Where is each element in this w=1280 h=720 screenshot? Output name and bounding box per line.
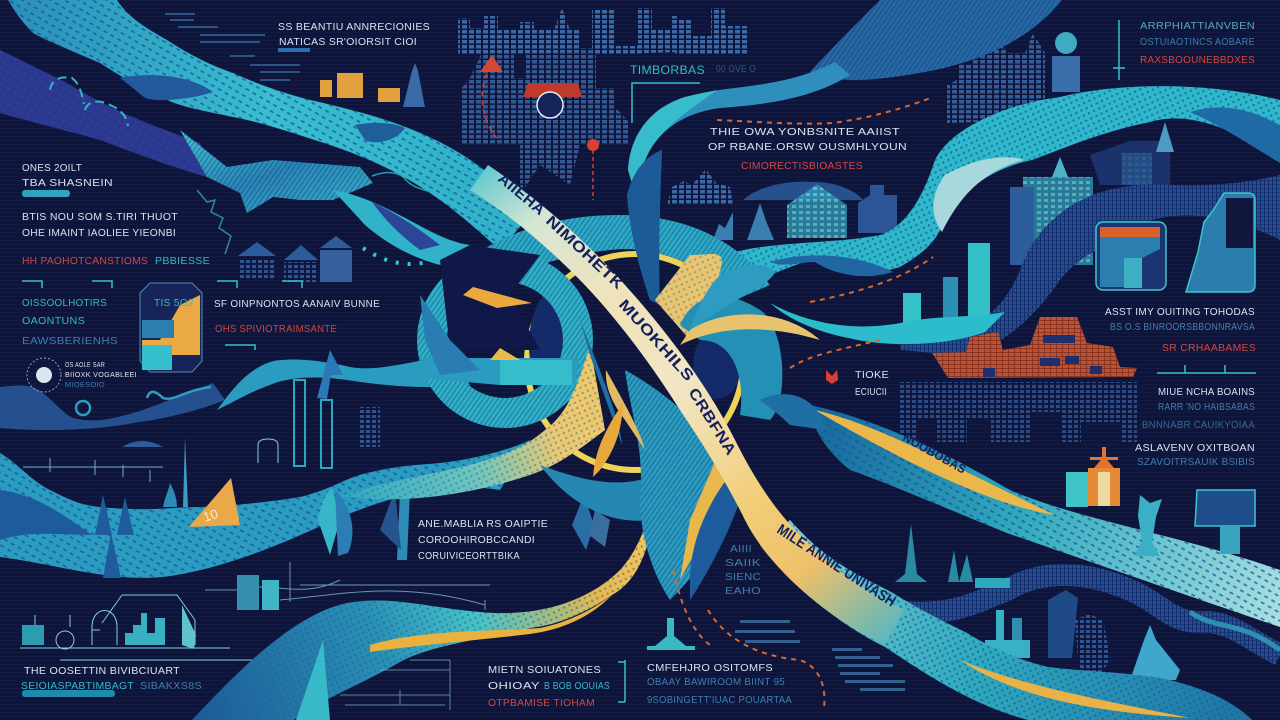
text block: right column [1105, 306, 1256, 468]
text block: middle lower left: CORUIVICEORTTBIKA [418, 550, 520, 562]
ribbon: lower right gold teal [760, 520, 1252, 720]
spectrum skyline [895, 524, 1010, 588]
left gauge card [140, 283, 202, 372]
text block: small stacked labels [725, 543, 761, 597]
knot: upper arc teal [470, 215, 770, 300]
text block: bottom centre: OHIOAY [488, 680, 540, 692]
line chart top left [165, 14, 300, 80]
text block: right column: BS O.S BINROORSBBONNRAVSA [1110, 321, 1255, 333]
ribbon text: central: NIMOHETK [542, 212, 627, 293]
text block: left column: TBA SHASNEIN [22, 177, 113, 189]
ribbon: lower teal under heading [770, 303, 1005, 344]
text block: left column: HH PAOHOTCANSTIOMS [22, 255, 148, 267]
text block: centre right label: TIOKE [855, 369, 889, 381]
text block: bottom left: SIBAKXS8S [140, 680, 202, 692]
line art skyline centre left [205, 562, 490, 610]
text block: middle lower left: ANE.MABLIA RS OAIPTIE [418, 518, 548, 530]
text block: top centre left [278, 21, 430, 48]
text block: left column: EAWSBERIENHS [22, 335, 118, 347]
ribbon: left large wave [0, 440, 530, 578]
text block: top right: OSTUIAOTINCS AOBARE [1140, 36, 1255, 48]
ribbon: far left dark wave [0, 383, 225, 430]
ribbon text: central: NOOBOBAS [901, 430, 969, 477]
skyline: right towers [903, 122, 1174, 338]
knot: central lower fan [580, 320, 740, 600]
icon: right bottom card and statue [1134, 490, 1255, 556]
text block: bottom centre right: 9SOBINGETT'IUAC POUARTAA [647, 694, 792, 706]
text block: left centre: SF OINPNONTOS AANAIV BUNNE [214, 298, 380, 310]
text block: bottom centre: MIETN SOIUATONES [488, 664, 601, 676]
text block: bottom left: SEIOIASPABTIMBAGT [21, 680, 134, 692]
text block: bottom centre: OTPBAMISE TIOHAM [488, 697, 595, 709]
knot: right loop [680, 265, 825, 430]
top left orange buildings [320, 63, 425, 107]
text block: small stacked labels: SAIIK [725, 557, 761, 569]
skyline: top right [947, 32, 1080, 123]
red markers and map icons [480, 55, 599, 200]
ribbon: bottom centre [192, 500, 652, 720]
text block: left column: OHE IMAINT IAOLIEE YIEONBI [22, 227, 176, 239]
ribbon: central cream [470, 165, 905, 645]
ribbon text: central: MILE ANNIE UNIVASH [774, 521, 899, 611]
text block: left column [22, 162, 210, 389]
text block: right column: BNNNABR CAUIKYOIAA [1142, 419, 1255, 431]
knot: gold dotted right [655, 254, 722, 340]
ribbon: right dark mesh [900, 175, 1280, 354]
knot: left teal ring [432, 267, 578, 413]
text block: middle lower left: COROOHIROBCCANDI [418, 534, 535, 546]
line art skyline left [23, 458, 163, 482]
text block: bottom left [21, 665, 202, 692]
ribbon: right mid [810, 405, 1280, 627]
knot: centre left blocks [420, 245, 580, 385]
text block: left column: OISSOOLHOTIRS [22, 297, 107, 309]
icon: temple bottom [647, 618, 695, 650]
ribbon text: central: AIIEHA [494, 170, 548, 219]
text block: bottom centre: B BOB OOUIAS [544, 680, 610, 692]
dashed arcs top left [50, 77, 128, 126]
ribbon: lower right arch [890, 575, 1280, 655]
line art: bottom circuit [340, 660, 450, 710]
text block: top centre left: SS BEANTIU ANNRECIONIES [278, 21, 430, 33]
pill highlights [22, 48, 310, 697]
ribbon text: central [494, 170, 969, 611]
text block: centre right label [826, 369, 889, 398]
towers centre left [237, 490, 410, 610]
text block: bottom centre right: CMFEHJRO OSITOMFS [647, 662, 773, 674]
text block: top centre left: NATICAS SR'OIORSIT CIOI [279, 36, 417, 48]
text block: right column: SZAVOITRSAUIK BSIBIS [1137, 456, 1255, 468]
ribbon: teal band into knot [333, 190, 480, 270]
icon: gold triangle [189, 478, 240, 527]
text block: right column: SR CRHAABAMES [1162, 342, 1256, 354]
text block: small stacked labels: SIENC [725, 571, 761, 583]
text block: left column: OAONTUNS [22, 315, 85, 327]
text block: left column: PBBIESSE [155, 255, 210, 267]
blue ribbon front of arc [627, 150, 662, 305]
small shapes bottom centre [380, 490, 610, 550]
ribbon: top left teal [8, 0, 530, 250]
knot: interior dark shapes [529, 290, 741, 400]
ribbon text: central: CRBFNA [685, 385, 739, 459]
text block: right column: MIUE NCHA BOAINS [1158, 386, 1255, 398]
text block: top centre: OP RBANE.ORSW OUSMHLYOUN [708, 141, 907, 153]
figures under arch [985, 590, 1180, 680]
text block: centre label [630, 63, 756, 77]
skyline: lower right [900, 382, 1137, 447]
knot: lower arc [540, 465, 655, 521]
skyline: top centre [458, 8, 747, 195]
text block: right column: RARR 'NO HAIBSABAS [1158, 401, 1255, 413]
ribbon: top right blue [810, 0, 1062, 80]
text block: bottom left: THE OOSETTIN BIVIBCIUART [24, 665, 180, 677]
skyline: centre below heading [667, 169, 897, 240]
text block: small stacked labels: EAHO [725, 585, 761, 597]
ribbon: mid left wave [217, 350, 470, 410]
text block: top centre: CIMORECTISBIOASTES [741, 160, 863, 172]
ribbon: upper centre teal swoop [627, 62, 850, 305]
text block: centre label: 00 OVE O [716, 63, 756, 75]
data bars bottom [735, 620, 905, 691]
text block: left column: BIIOXK VOGABLEEI [65, 372, 137, 379]
card: right tall panel [1186, 193, 1255, 292]
text block: centre label: TIMBORBAS [630, 63, 705, 77]
text block: left column: BTIS NOU SOM S.TIRI THUOT [22, 211, 178, 223]
knot: yellow ring [527, 254, 743, 470]
text block: top centre: THIE OWA YONBSNITE AAIIST [710, 126, 900, 138]
spires on left ribbon [95, 488, 352, 578]
ribbon: fan shape left [180, 130, 373, 213]
text block: bottom centre right: OBAAY BAWIROOM BIINT 95 [647, 676, 785, 688]
text block: bottom centre right [647, 662, 792, 706]
text block: centre right label: ECIUCII [855, 386, 887, 398]
left gauge card: TIS 5O2 [154, 297, 194, 309]
card: right image panel [1096, 222, 1166, 290]
text block: right column: ASST IMY OUITING TOHODAS [1105, 306, 1255, 318]
knot: lower dotted band [340, 345, 605, 499]
ribbon: indigo upper left [0, 50, 218, 180]
knot: gold wedge [593, 403, 623, 477]
ribbon: upper right teal [717, 86, 1280, 282]
text block: left column: ONES 2OILT [22, 162, 82, 174]
text block: left centre [214, 298, 380, 335]
text block: top right: ARRPHIATTIANVBEN [1140, 20, 1255, 32]
text block: small stacked labels: AIIII [730, 543, 752, 555]
text block: right column: ASLAVENV OXITBOAN [1135, 442, 1255, 454]
mid left towers [122, 380, 380, 507]
text block: left column: OS AOLE SAR [65, 362, 105, 369]
text block: middle lower left [418, 518, 548, 562]
line art: bottom left town [20, 595, 300, 660]
icon: left seal [27, 358, 61, 392]
text block: top centre [708, 126, 907, 172]
dashed route lines [673, 97, 933, 708]
text block: top right: RAXSBOOUNEBBDXES [1140, 54, 1255, 66]
zigzag lines and dots left [197, 173, 430, 264]
text block: left centre: OHS SPIVIOTRAIMSANTE [215, 323, 337, 335]
ribbon text: central: MUOKHILS [615, 296, 697, 385]
icon: orange tower [1066, 447, 1120, 507]
text block: top right [1140, 20, 1255, 66]
text block: left column: MIOESOIO [65, 382, 105, 389]
text block: bottom centre [488, 664, 610, 709]
icon: gold triangle: 10 [201, 506, 220, 525]
orange brick building [932, 317, 1137, 378]
left classical buildings [238, 236, 352, 282]
